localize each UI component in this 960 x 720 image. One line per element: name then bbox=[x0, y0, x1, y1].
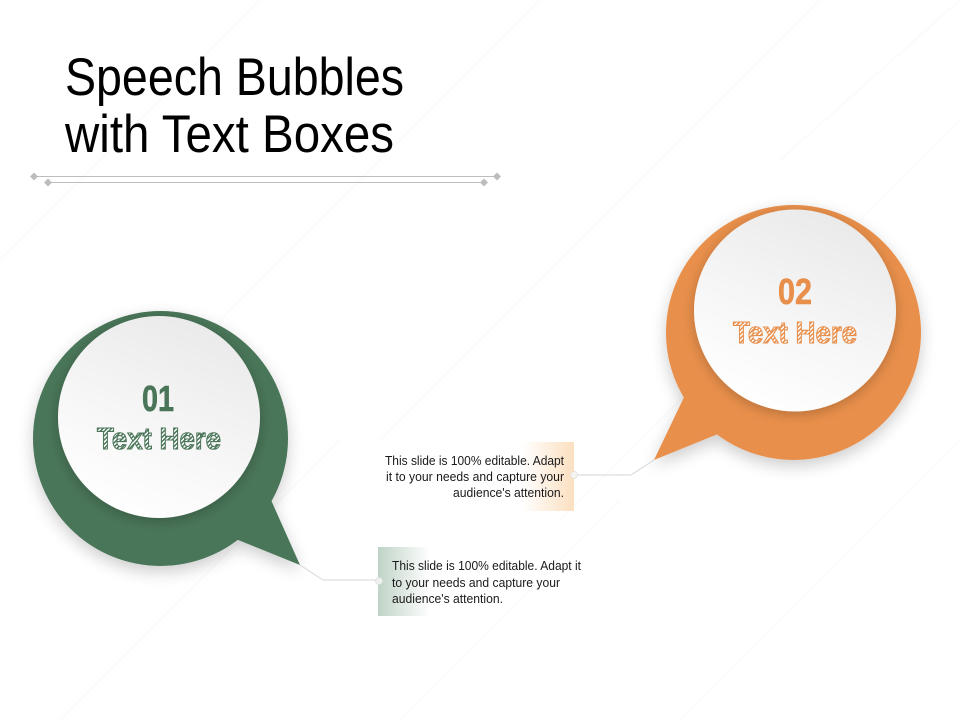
title bbox=[64, 48, 404, 164]
connector 01 bbox=[300, 565, 378, 580]
number 01: 01 bbox=[142, 378, 174, 419]
title divider lines bbox=[30, 172, 501, 186]
number 02: 02 bbox=[778, 271, 812, 312]
title: Speech Bubbles bbox=[65, 48, 404, 107]
label text here: Text Here bbox=[733, 315, 857, 350]
description bbox=[392, 558, 581, 606]
label text here: Text Here bbox=[97, 421, 221, 456]
description: This slide is 100% editable. Adapt it bbox=[392, 558, 581, 573]
green bubble shape bbox=[33, 311, 300, 566]
white disc bbox=[694, 210, 896, 412]
gradient tab bbox=[378, 547, 430, 616]
orange bubble shape bbox=[654, 205, 921, 460]
gradient tab bbox=[522, 442, 574, 511]
connector 02 bbox=[575, 460, 654, 475]
description: it to your needs and capture your bbox=[386, 469, 565, 484]
white disc bbox=[58, 316, 260, 518]
speech bubble 01 bbox=[33, 311, 300, 566]
description: audience's attention. bbox=[453, 485, 564, 500]
speech bubble 02 bbox=[654, 205, 921, 460]
description bbox=[385, 453, 565, 500]
text box 01 bbox=[376, 547, 581, 616]
text box 02 bbox=[385, 442, 578, 511]
description: audience's attention. bbox=[392, 591, 503, 606]
description: to your needs and capture your bbox=[392, 575, 561, 590]
description: This slide is 100% editable. Adapt bbox=[385, 453, 564, 468]
connector dot bbox=[376, 578, 382, 584]
title: with Text Boxes bbox=[64, 105, 394, 164]
connector dot bbox=[570, 472, 578, 478]
